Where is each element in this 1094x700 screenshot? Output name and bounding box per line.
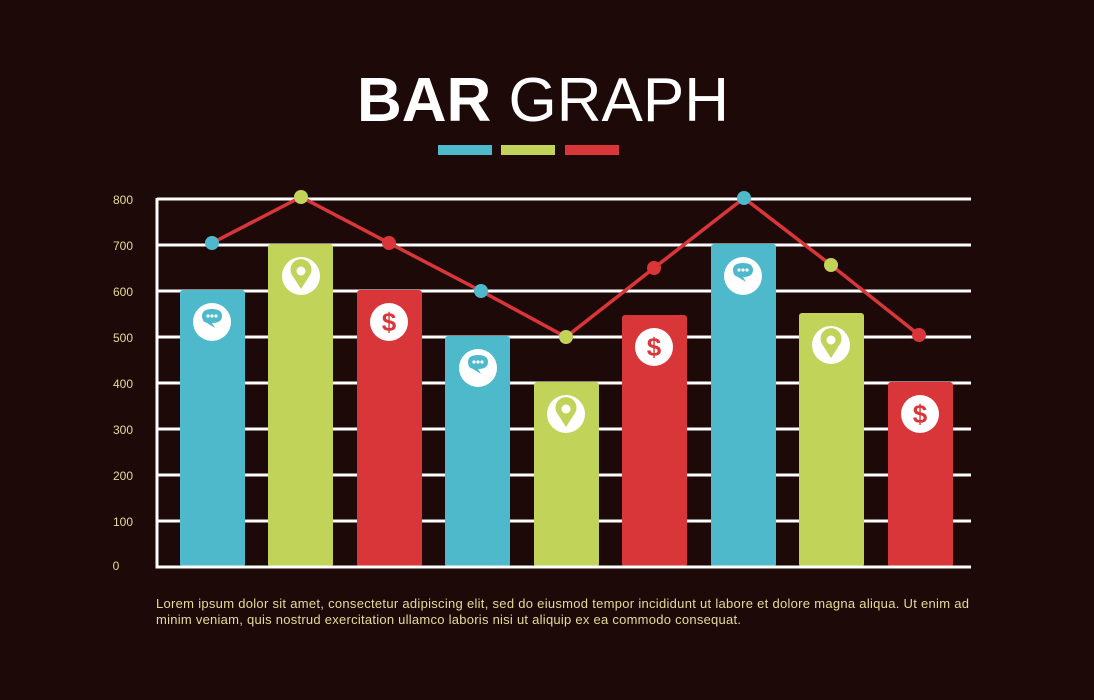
y-axis labels: 600 (113, 285, 133, 299)
title color legend (438, 145, 619, 155)
bar 1 (180, 290, 245, 567)
bar 8 (799, 313, 864, 567)
axes (157, 198, 971, 567)
bar 7 (711, 244, 776, 567)
description text (156, 596, 969, 627)
bar 2 (268, 244, 333, 567)
bar 4 (445, 336, 510, 567)
y-axis labels: 100 (113, 515, 133, 529)
y-axis labels: 400 (113, 377, 133, 391)
y-axis labels: 800 (113, 193, 133, 207)
bars (180, 244, 953, 567)
y-axis labels (113, 193, 133, 573)
description text: Lorem ipsum dolor sit amet, consectetur adipiscing elit, sed do eiusmod tempor incididunt ut labore et dolore magna aliqua. Ut enim ad (156, 596, 969, 611)
y-axis labels: 200 (113, 469, 133, 483)
bar 5 (534, 382, 599, 567)
bar 6 (622, 315, 687, 567)
y-axis labels: 0 (113, 559, 120, 573)
y-axis labels: 500 (113, 331, 133, 345)
description text: minim veniam, quis nostrud exercitation ullamco laboris nisi ut aliquip ex ea commodo consequat. (156, 612, 741, 627)
bar 9 (888, 382, 953, 567)
trend line (205, 190, 926, 344)
y-axis labels: 700 (113, 239, 133, 253)
bar 3 (357, 290, 422, 567)
title: BAR GRAPH (357, 66, 729, 135)
y-axis labels: 300 (113, 423, 133, 437)
